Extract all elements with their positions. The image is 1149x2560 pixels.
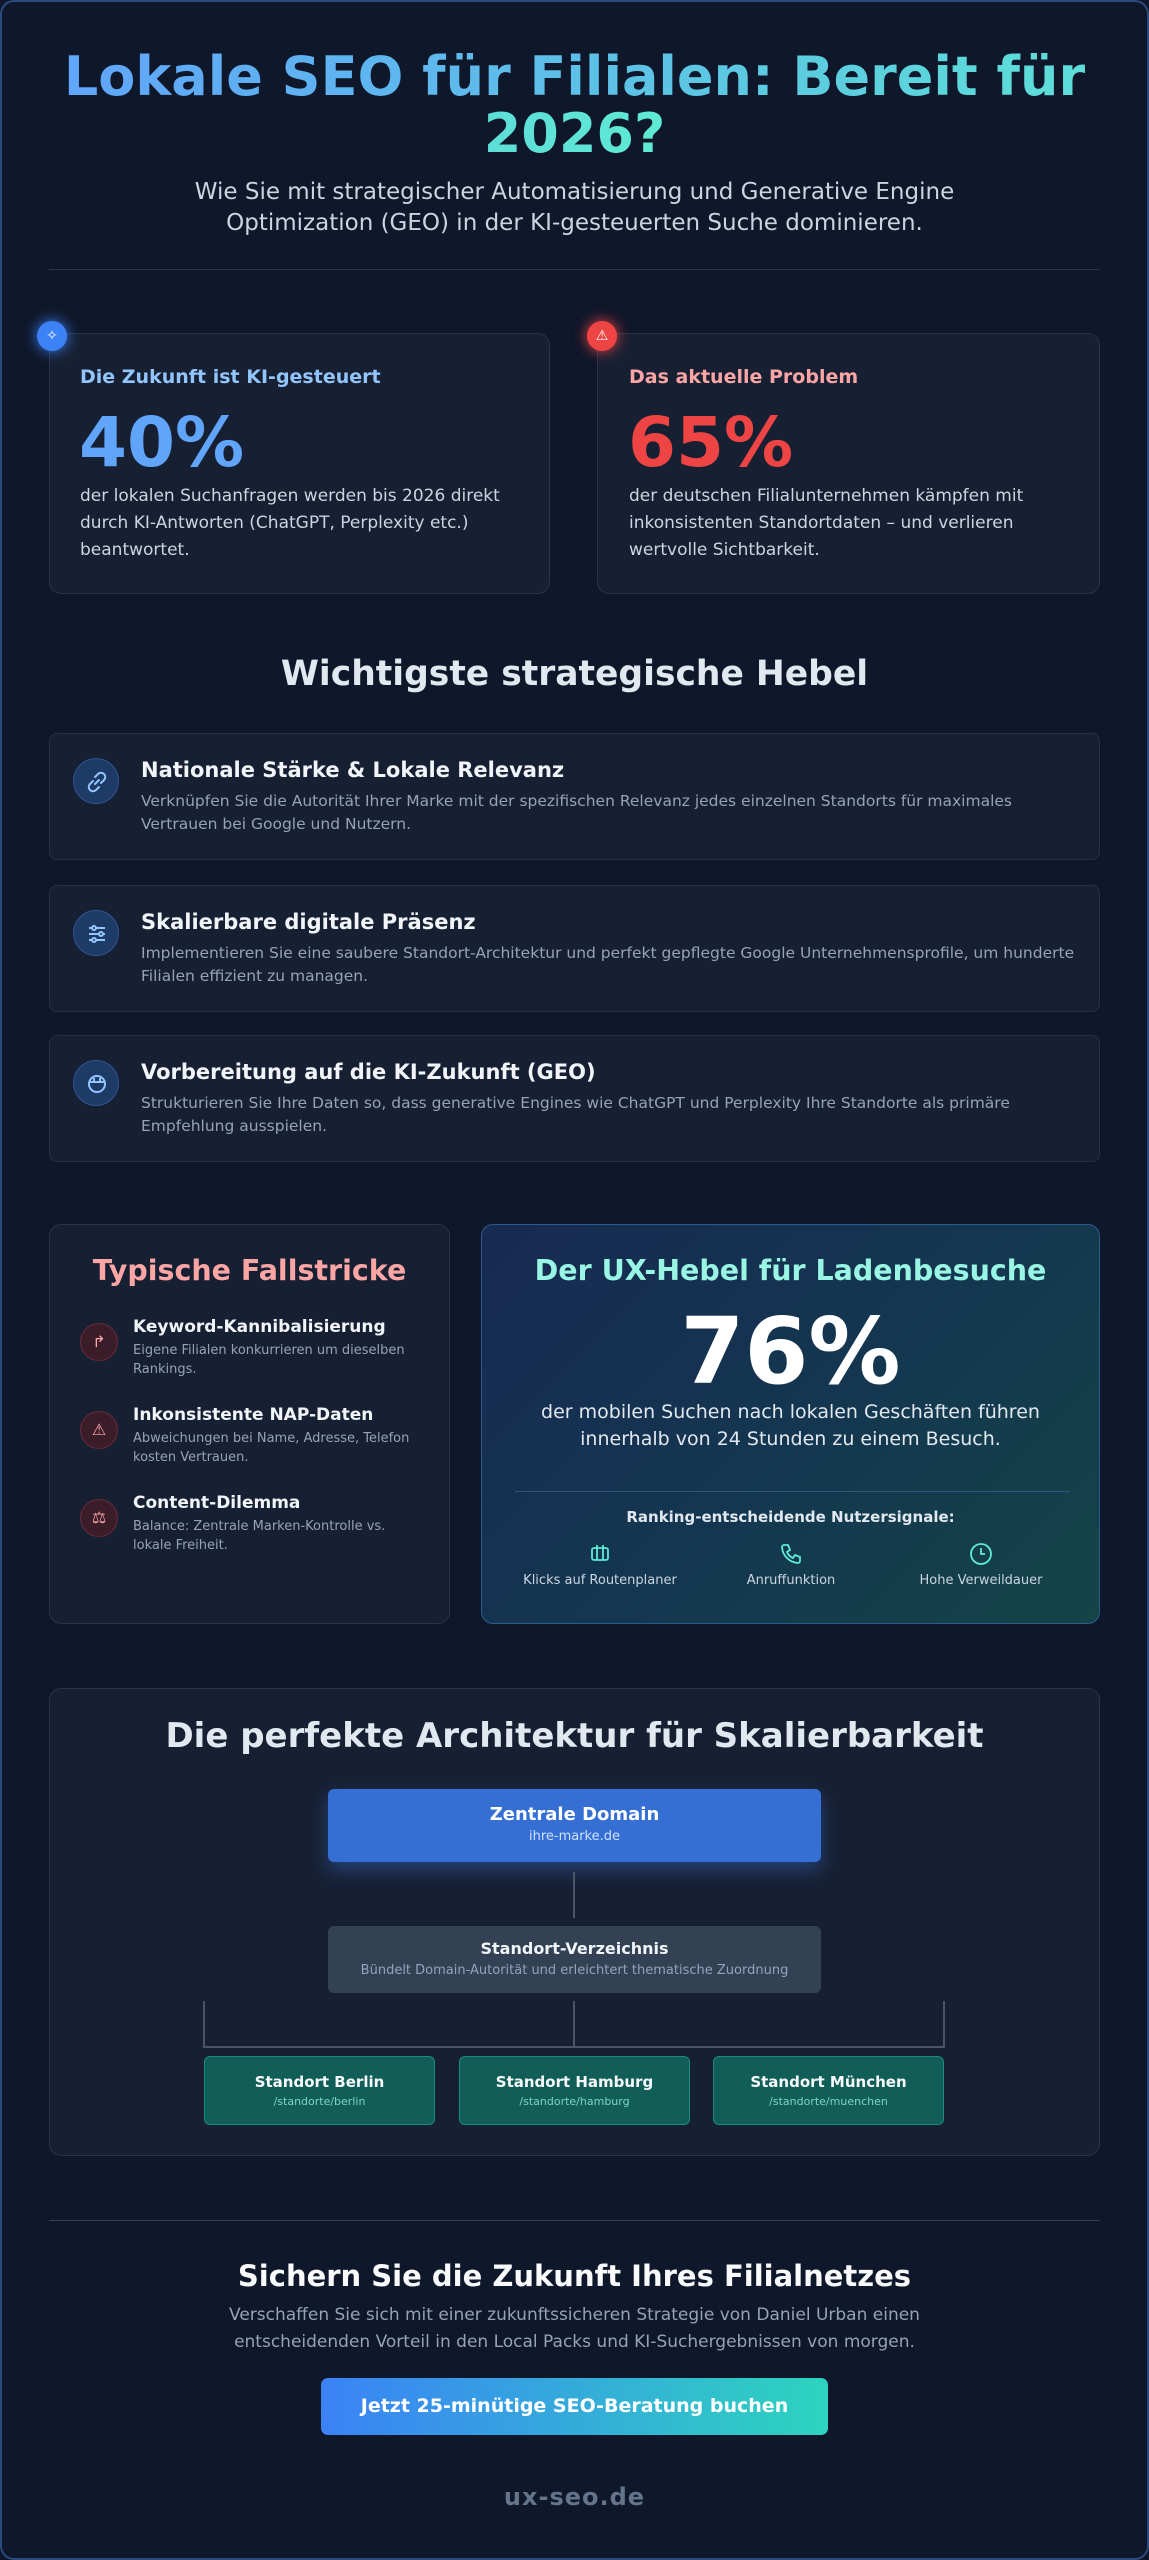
box: central domain: ihre-marke.de: [529, 1829, 620, 1844]
lever 1: Nationale Stärke & Lokale Relevanz: [141, 758, 564, 782]
heading: levers: Wichtigste strategische Hebel: [281, 654, 868, 694]
box: directory: Standort-Verzeichnis: [480, 1939, 668, 1958]
card heading: Die Zukunft ist KI-gesteuert: [80, 366, 381, 388]
lever 3: Vorbereitung auf die KI-Zukunft (GEO): [141, 1060, 596, 1084]
title: 2026?: [484, 102, 665, 165]
CTA text: [229, 2305, 920, 2352]
pitfall 3: Balance: Zentrale Marken-Kontrolle vs. lokale Freiheit.: [133, 1519, 385, 1553]
icon: warning: [80, 1411, 118, 1449]
pitfall 1: [80, 1317, 405, 1377]
icon: link: [73, 758, 119, 804]
pitfall 3: [80, 1493, 385, 1553]
box: München: /standorte/muenchen: [769, 2095, 888, 2108]
subtitle: Optimization (GEO) in der KI-gesteuerten Suche dominieren.: [226, 210, 923, 236]
signals heading: Ranking-entscheidende Nutzersignale:: [626, 1508, 955, 1526]
signal: call: [746, 1544, 835, 1588]
pitfalls heading: Typische Fallstricke: [93, 1254, 406, 1287]
box: Hamburg: Standort Hamburg: [496, 2073, 653, 2091]
box: Berlin: /standorte/berlin: [274, 2095, 365, 2108]
signal: route: [523, 1545, 677, 1588]
lever 3: Strukturieren Sie Ihre Daten so, dass generative Engines wie ChatGPT und Perplexity Ihre Standorte als primäre Empfehlung ausspielen.: [141, 1094, 1010, 1135]
UX text: innerhalb von 24 Stunden zu einem Besuch.: [580, 1428, 1001, 1450]
pitfall 1: Keyword-Kannibalisierung: [133, 1317, 386, 1337]
card heading: Das aktuelle Problem: [629, 366, 858, 388]
pitfall 2: [80, 1405, 409, 1465]
UX heading: Der UX-Hebel für Ladenbesuche: [535, 1254, 1046, 1287]
icon: warning badge: [587, 321, 617, 351]
icon: split: ↱: [92, 1332, 106, 1351]
icon: warning: ⚠: [92, 1420, 106, 1439]
architecture heading: Die perfekte Architektur für Skalierbarkeit: [165, 1716, 984, 1756]
box: Berlin: Standort Berlin: [255, 2073, 384, 2091]
pitfall 2: Abweichungen bei Name, Adresse, Telefon kosten Vertrauen.: [133, 1431, 409, 1465]
title: [64, 45, 1085, 165]
stat 40%: 40%: [79, 403, 244, 483]
box: directory: Bündelt Domain-Autorität und erleichtert thematische Zuordnung: [361, 1963, 788, 1978]
signal: call: Anruffunktion: [747, 1573, 835, 1588]
box: central domain: Zentrale Domain: [490, 1804, 659, 1825]
lever 1: Verknüpfen Sie die Autorität Ihrer Marke mit der spezifischen Relevanz jedes einzelnen Standorts für maximales Vertrauen bei Google und Nutzern.: [141, 792, 1012, 833]
footer: ux-seo.de: [504, 2483, 645, 2511]
icon: balance: [80, 1499, 118, 1537]
signal: route: Klicks auf Routenplaner: [523, 1573, 677, 1588]
lever 2: Skalierbare digitale Präsenz: [141, 910, 476, 934]
icon: split: [80, 1323, 118, 1361]
signal: time: Hohe Verweildauer: [920, 1573, 1042, 1588]
stat 76%: 76%: [680, 1298, 901, 1405]
CTA button: Jetzt 25-minütige SEO-Beratung buchen: [361, 2395, 788, 2417]
signal: time: [920, 1543, 1042, 1588]
icon: ai badge: [37, 321, 67, 351]
lever 3: [49, 1035, 1100, 1162]
card text: der lokalen Suchanfragen werden bis 2026 direkt durch KI-Antworten (ChatGPT, Perplexity etc.) beantwortet.: [80, 486, 500, 560]
panel: KI stat: [49, 333, 550, 594]
CTA text: entscheidenden Vorteil in den Local Packs und KI-Suchergebnissen von morgen.: [234, 2332, 915, 2352]
icon: balance: ⚖: [92, 1508, 106, 1527]
panel: problem stat: [597, 333, 1100, 594]
lever 2: [49, 885, 1100, 1012]
CTA heading: Sichern Sie die Zukunft Ihres Filialnetzes: [238, 2259, 911, 2293]
icon: warning badge: ⚠: [596, 328, 608, 344]
icon: sliders: [73, 910, 119, 956]
CTA text: Verschaffen Sie sich mit einer zukunftssicheren Strategie von Daniel Urban einen: [229, 2305, 920, 2325]
panel: pitfalls: [49, 1224, 450, 1624]
pitfall 3: Content-Dilemma: [133, 1493, 300, 1513]
UX text: [541, 1401, 1040, 1450]
lever 1: [49, 733, 1100, 860]
title: Lokale SEO für Filialen: Bereit für: [64, 45, 1085, 108]
CTA button: [321, 2378, 828, 2435]
UX text: der mobilen Suchen nach lokalen Geschäften führen: [541, 1401, 1040, 1423]
pitfall 2: Inkonsistente NAP-Daten: [133, 1405, 373, 1425]
icon: brain: [73, 1060, 119, 1106]
box: München: Standort München: [750, 2073, 907, 2091]
box: Berlin: [204, 2056, 435, 2125]
card text: der deutschen Filialunternehmen kämpfen mit inkonsistenten Standortdaten – und verlieren wertvolle Sichtbarkeit.: [629, 486, 1023, 560]
box: Hamburg: /standorte/hamburg: [519, 2095, 630, 2108]
box: central domain: [328, 1789, 821, 1862]
lever 2: Implementieren Sie eine saubere Standort-Architektur und perfekt gepflegte Google Unternehmensprofile, um hunderte Filialen effizient zu managen.: [141, 944, 1074, 985]
subtitle: Wie Sie mit strategischer Automatisierung und Generative Engine: [195, 179, 954, 205]
panel: architecture: [49, 1688, 1100, 2156]
box: Hamburg: [459, 2056, 690, 2125]
stat 65%: 65%: [628, 403, 793, 483]
icon: ai badge: ✧: [46, 328, 58, 344]
subtitle: [195, 179, 954, 236]
pitfall 1: Eigene Filialen konkurrieren um dieselben Rankings.: [133, 1343, 405, 1377]
box: München: [713, 2056, 944, 2125]
box: directory: [328, 1926, 821, 1993]
panel: UX lever: [481, 1224, 1100, 1624]
